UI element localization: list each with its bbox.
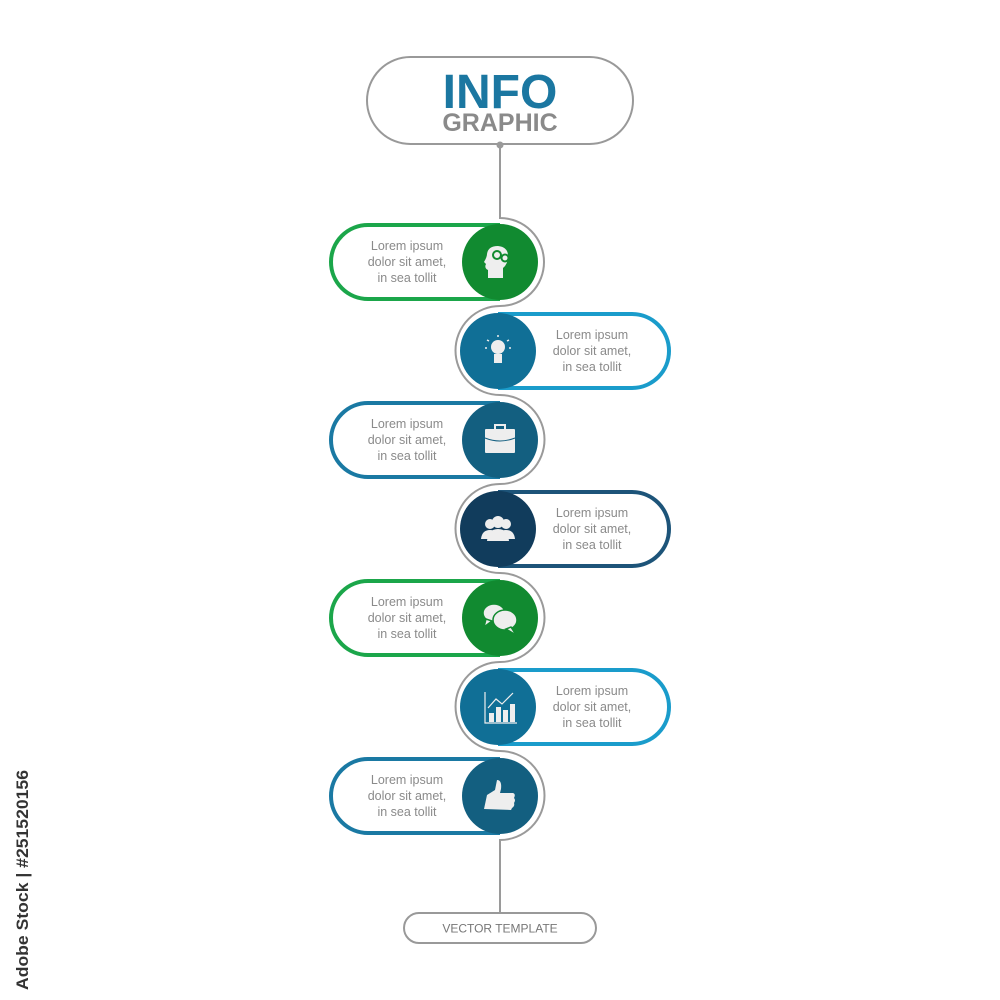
step 5 (331, 580, 538, 656)
step 1 (331, 224, 538, 300)
connector line (456, 142, 544, 913)
step 2: in sea tollit (562, 360, 622, 374)
step 6: in sea tollit (562, 716, 622, 730)
step 5: Lorem ipsum (371, 595, 443, 609)
footer label (404, 913, 596, 943)
step 3 (331, 402, 538, 478)
step 6 (460, 669, 669, 745)
icon: people group (481, 516, 515, 541)
step 4: Lorem ipsum (556, 506, 628, 520)
icon: briefcase (485, 425, 515, 453)
title box: INFO (443, 66, 557, 119)
title box (367, 57, 633, 144)
side id text: Adobe Stock | #251520156 (13, 770, 32, 990)
step 5: dolor sit amet, (368, 611, 446, 625)
step 1: Lorem ipsum (371, 239, 443, 253)
step 2: Lorem ipsum (556, 328, 628, 342)
icon: head with gears (484, 246, 508, 278)
step 2: dolor sit amet, (553, 344, 631, 358)
step 6: Lorem ipsum (556, 684, 628, 698)
step 7: in sea tollit (377, 805, 437, 819)
step 3: dolor sit amet, (368, 433, 446, 447)
step 4: in sea tollit (562, 538, 622, 552)
step 7 (331, 758, 538, 834)
step 1: dolor sit amet, (368, 255, 446, 269)
footer label: VECTOR TEMPLATE (442, 922, 558, 936)
step 5: in sea tollit (377, 627, 437, 641)
step 3: in sea tollit (377, 449, 437, 463)
step 2 (460, 313, 669, 389)
step 4: dolor sit amet, (553, 522, 631, 536)
step 7: Lorem ipsum (371, 773, 443, 787)
icon: speech bubbles (483, 604, 517, 635)
title box: GRAPHIC (442, 109, 558, 137)
step 4 (460, 491, 669, 567)
step 7: dolor sit amet, (368, 789, 446, 803)
icon: thumbs up (484, 780, 515, 810)
icon: light bulb (485, 335, 511, 363)
step 6: dolor sit amet, (553, 700, 631, 714)
step 1: in sea tollit (377, 271, 437, 285)
icon: bar chart (485, 692, 517, 723)
step 3: Lorem ipsum (371, 417, 443, 431)
